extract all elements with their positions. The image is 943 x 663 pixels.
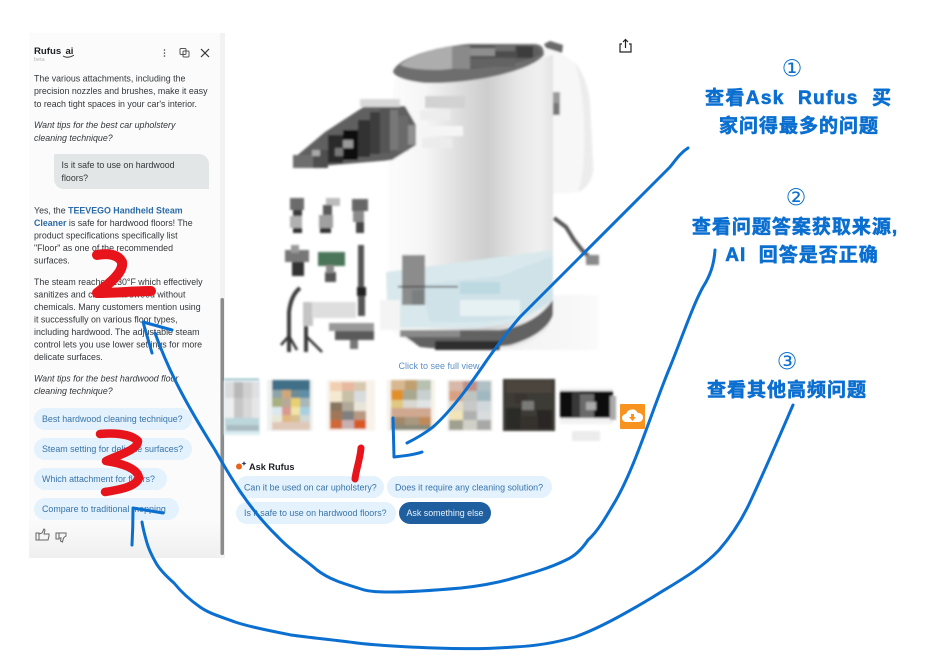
suggestion pill: compare: Compare to traditional mopping — [42, 504, 166, 514]
question pill: car upholstery: Can it be used on car upholstery? — [244, 482, 377, 492]
follow-up prompt: hardwood: Want tips for the best hardwood floor — [34, 374, 179, 384]
answer text: safe for hardwood — [34, 206, 193, 266]
sidebar header: Rufus logo and controls: beta — [34, 57, 46, 63]
sidebar header: Rufus logo and controls: ai — [66, 46, 73, 57]
callout 2: 查看问题答案获取来源, — [692, 215, 898, 238]
answer text: attachments: to reach tight spaces in your car's interior. — [34, 99, 197, 109]
power cord — [554, 218, 590, 258]
answer text: steam temperature: it successfully on various floor types, — [34, 314, 178, 324]
callout 1: 查看Ask Rufus 买 — [705, 87, 892, 109]
number marker 3 — [100, 434, 139, 492]
thumbnail 7 — [560, 388, 616, 441]
arrow: callout 3 to sidebar suggestions — [132, 405, 793, 649]
suggestion pill: technique — [34, 408, 192, 430]
thumbnail 6 — [503, 379, 555, 431]
suggestion pill: attachment — [34, 468, 167, 490]
product image: pixelated steam cleaner — [293, 41, 599, 350]
answer text: safe for hardwood: Cleaner is safe for hardwood floors! The — [34, 218, 193, 228]
number marker 1 — [355, 448, 361, 479]
user question bubble: floors? — [62, 173, 88, 183]
callout 2: ② — [786, 185, 806, 211]
nozzle mosaic — [293, 99, 416, 168]
thumbnail 2 — [267, 380, 313, 431]
panel: Rufus chat sidebar — [29, 33, 225, 558]
callout 1: ① — [782, 56, 802, 82]
handle — [543, 48, 594, 193]
scrollbar — [220, 298, 224, 555]
answer text: safe for hardwood: "Floor" as one of the recommended — [34, 243, 173, 253]
section: Ask Rufus questions — [236, 461, 552, 524]
answer text: attachments — [34, 74, 208, 109]
number marker 2 — [97, 254, 151, 293]
icon: thumbs up and down — [36, 529, 66, 542]
answer text: steam temperature: including hardwood. The adjustable steam — [34, 327, 200, 337]
question pill: hardwood floors: Is it safe to use on hardwood floors? — [244, 508, 387, 518]
button: ask something else: Ask something else — [406, 508, 484, 518]
accessories: pixelated attachments — [281, 198, 374, 352]
answer text: steam temperature: The steam reaches 230°F which effectively — [34, 277, 203, 287]
icon: orange cloud download — [620, 404, 645, 429]
answer text: steam temperature: delicate surfaces. — [34, 352, 103, 362]
floor shadow — [480, 295, 598, 350]
arrow: callout 1 to Ask Rufus questions — [393, 148, 688, 457]
callout 2 — [692, 185, 898, 266]
water tank — [386, 250, 553, 328]
question pill: car upholstery — [236, 476, 384, 498]
answer text: steam temperature: chemicals. Many customers mention using — [34, 302, 201, 312]
thumbnail 1 — [224, 379, 260, 435]
sidebar header: Rufus logo and controls: Rufus — [34, 46, 61, 57]
callout 3: ③ — [777, 349, 797, 375]
suggestion pill: steam setting: Steam setting for delicate surfaces? — [42, 444, 183, 454]
follow-up prompt: upholstery: cleaning technique? — [34, 133, 113, 143]
thumbnail 4 — [387, 380, 435, 431]
answer text: safe for hardwood: surfaces. — [34, 256, 70, 266]
follow-up prompt: upholstery: Want tips for the best car upholstery — [34, 120, 176, 130]
answer text: steam temperature — [34, 277, 203, 362]
question pill: hardwood floors — [236, 502, 396, 524]
user question bubble: Is it safe to use on hardwood — [62, 160, 175, 170]
answer text: safe for hardwood: Yes, the TEEVEGO Handheld Steam — [34, 206, 183, 216]
suggestion pill: attachment: Which attachment for floors? — [42, 474, 155, 484]
Ask Rufus label: Ask Rufus — [249, 462, 294, 472]
question pill: cleaning solution — [387, 476, 552, 498]
thumbnail 3 — [327, 380, 375, 431]
callout 1: 家问得最多的问题 — [719, 114, 879, 137]
callout 3 — [707, 349, 867, 401]
callout 2: AI 回答是否正确 — [725, 244, 879, 266]
arrow: callout 2 to sidebar answer — [143, 250, 715, 592]
answer text: attachments: The various attachments, including the — [34, 74, 185, 84]
answer text: safe for hardwood: product specifications specifically list — [34, 230, 178, 240]
callout 1 — [705, 56, 892, 137]
question pill: cleaning solution: Does it require any cleaning solution? — [395, 482, 543, 492]
suggestion pill: technique: Best hardwood cleaning technique? — [42, 414, 183, 424]
steamer body — [388, 55, 553, 347]
cleaning wands — [289, 288, 306, 352]
answer text: attachments: precision nozzles and brushes, make it easy — [34, 86, 208, 96]
user question bubble — [54, 154, 209, 189]
top opening — [400, 45, 541, 70]
link: click to see full view: Click to see full view — [398, 361, 480, 371]
button: ask something else — [399, 502, 491, 524]
top rim — [393, 44, 544, 83]
thumbnail 5 — [447, 380, 493, 431]
callout 3: 查看其他高频问题 — [707, 378, 867, 401]
answer text: steam temperature: control lets you use lower settings for more — [34, 340, 202, 350]
answer text: steam temperature: sanitizes and cleans hardwood without — [34, 290, 186, 300]
thumbnail strip — [224, 379, 616, 441]
base — [400, 300, 553, 349]
suggestion pill: steam setting — [34, 438, 192, 460]
follow-up prompt: upholstery — [34, 120, 176, 143]
follow-up prompt: hardwood — [34, 374, 179, 396]
follow-up prompt: hardwood: cleaning technique? — [34, 386, 113, 396]
sidebar header: Rufus logo and controls — [34, 46, 209, 63]
body mosaic shading — [425, 96, 465, 108]
suggestion pill: compare — [34, 498, 179, 520]
icon: share — [620, 40, 631, 52]
